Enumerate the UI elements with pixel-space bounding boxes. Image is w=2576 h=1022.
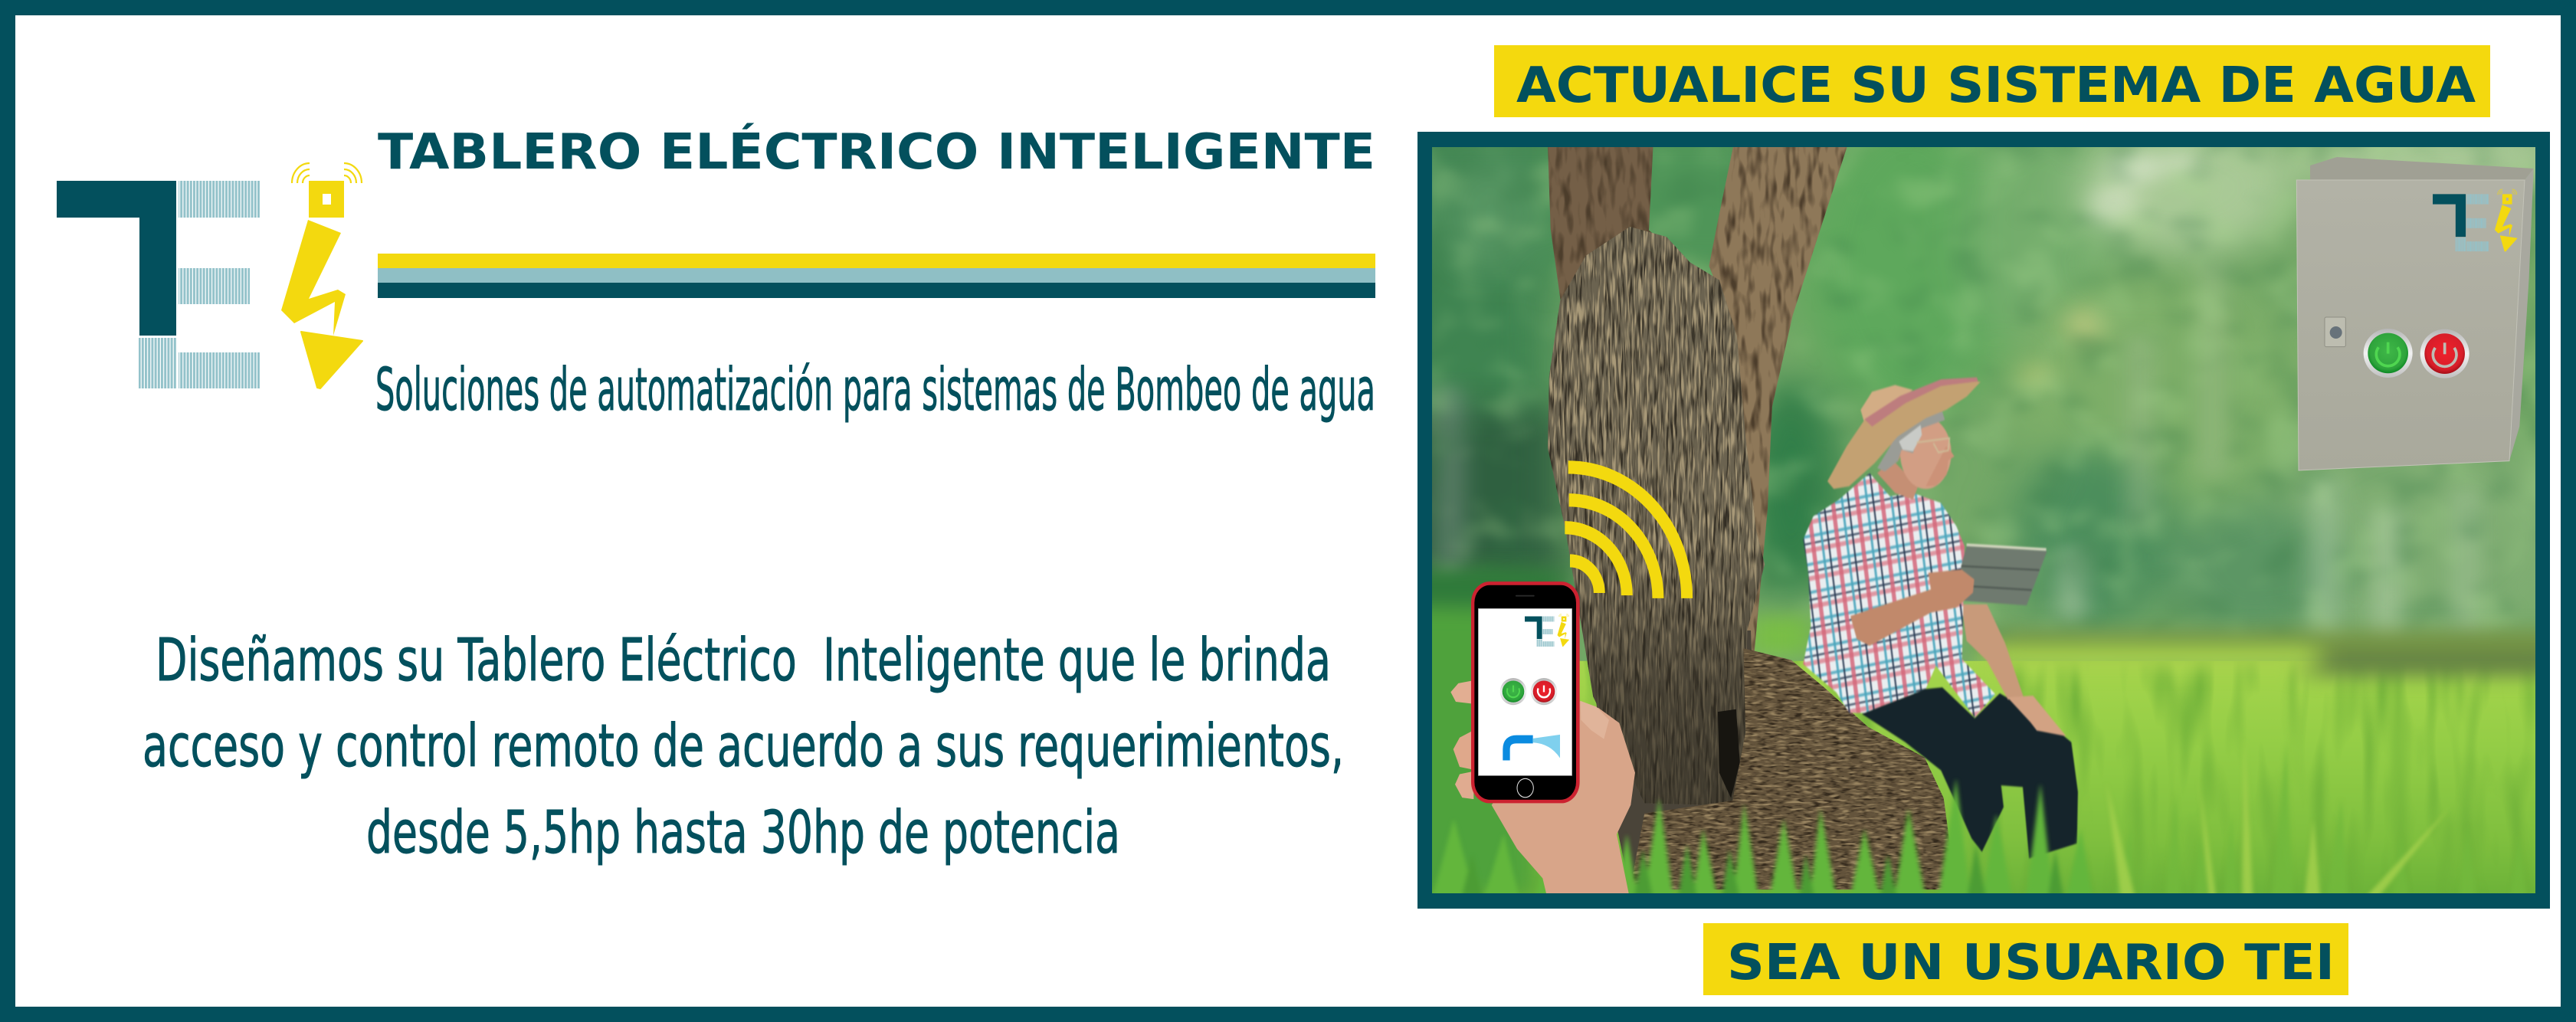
phone body xyxy=(1471,581,1580,803)
banner: actualice: ACTUALICE SU SISTEMA DE AGUA xyxy=(1516,57,2476,114)
hanging root mass xyxy=(1548,227,1765,806)
title: TABLERO ELÉCTRICO INTELIGENTE xyxy=(378,123,1375,181)
hand holding phone xyxy=(1450,581,1635,894)
far arm xyxy=(1961,604,2024,699)
tree trunks and roots xyxy=(1548,143,1956,889)
phone green button xyxy=(1500,678,1526,705)
subtitle: Soluciones de automatización para sistemas de Bombeo de agua xyxy=(375,356,1375,424)
banner: sea un usuario: SEA UN USUARIO TEI xyxy=(1727,935,2335,991)
hat crown xyxy=(1860,385,1913,423)
phone screen xyxy=(1478,608,1572,775)
phone red button xyxy=(1531,678,1557,705)
door latch xyxy=(2325,317,2345,347)
hollow at the base xyxy=(1718,709,1740,798)
hair xyxy=(1877,411,1945,471)
foliage texture xyxy=(1432,147,2535,625)
body text block: acceso y control remoto de acuerdo a sus requerimientos, xyxy=(143,712,1344,781)
cabinet side xyxy=(2509,169,2534,461)
straw mound xyxy=(1630,648,1956,889)
phone speaker xyxy=(1516,595,1535,597)
phone home button xyxy=(1517,778,1533,798)
ear xyxy=(1889,443,1901,462)
wifi signal arcs xyxy=(1565,467,1687,598)
green power button xyxy=(2364,329,2413,378)
body text block: desde 5,5hp hasta 30hp de potencia xyxy=(366,799,1120,867)
trousers xyxy=(1862,687,2078,859)
man sitting with tablet xyxy=(1803,378,2078,859)
foreground grass xyxy=(1432,737,2527,899)
blurred forest background xyxy=(1432,147,2535,893)
cabinet top flange xyxy=(2310,157,2534,180)
panel: farmer photo scene xyxy=(1432,147,2535,893)
body text block: Diseñamos su Tablero Eléctrico Inteligente que le brinda xyxy=(156,627,1331,695)
tablet xyxy=(1961,546,2047,605)
face xyxy=(1900,418,1952,489)
near arm and hand xyxy=(1850,569,1975,646)
glasses xyxy=(1917,438,1949,453)
banner: sea un usuario xyxy=(1703,923,2348,995)
red power button xyxy=(2420,329,2469,378)
panel logo xyxy=(2433,189,2517,251)
panel: photo frame xyxy=(1417,132,2550,909)
tricolor divider bars xyxy=(378,254,1375,298)
electrical panel xyxy=(2296,157,2534,470)
root mass lower shade xyxy=(1574,562,1761,804)
phone logo xyxy=(1525,614,1569,647)
right branch xyxy=(1709,147,1847,651)
shirt xyxy=(1803,473,1995,718)
cabinet door xyxy=(2296,180,2525,470)
lower dark trunk xyxy=(1586,631,1755,889)
hat brim xyxy=(1827,380,1981,489)
logo: TEI mark with lightning bolt xyxy=(57,163,362,388)
left trunk xyxy=(1548,147,1653,300)
meadow xyxy=(1410,661,2576,899)
phone pipe icon xyxy=(1506,735,1560,761)
body text block xyxy=(143,627,1344,867)
neck xyxy=(1877,460,1918,500)
